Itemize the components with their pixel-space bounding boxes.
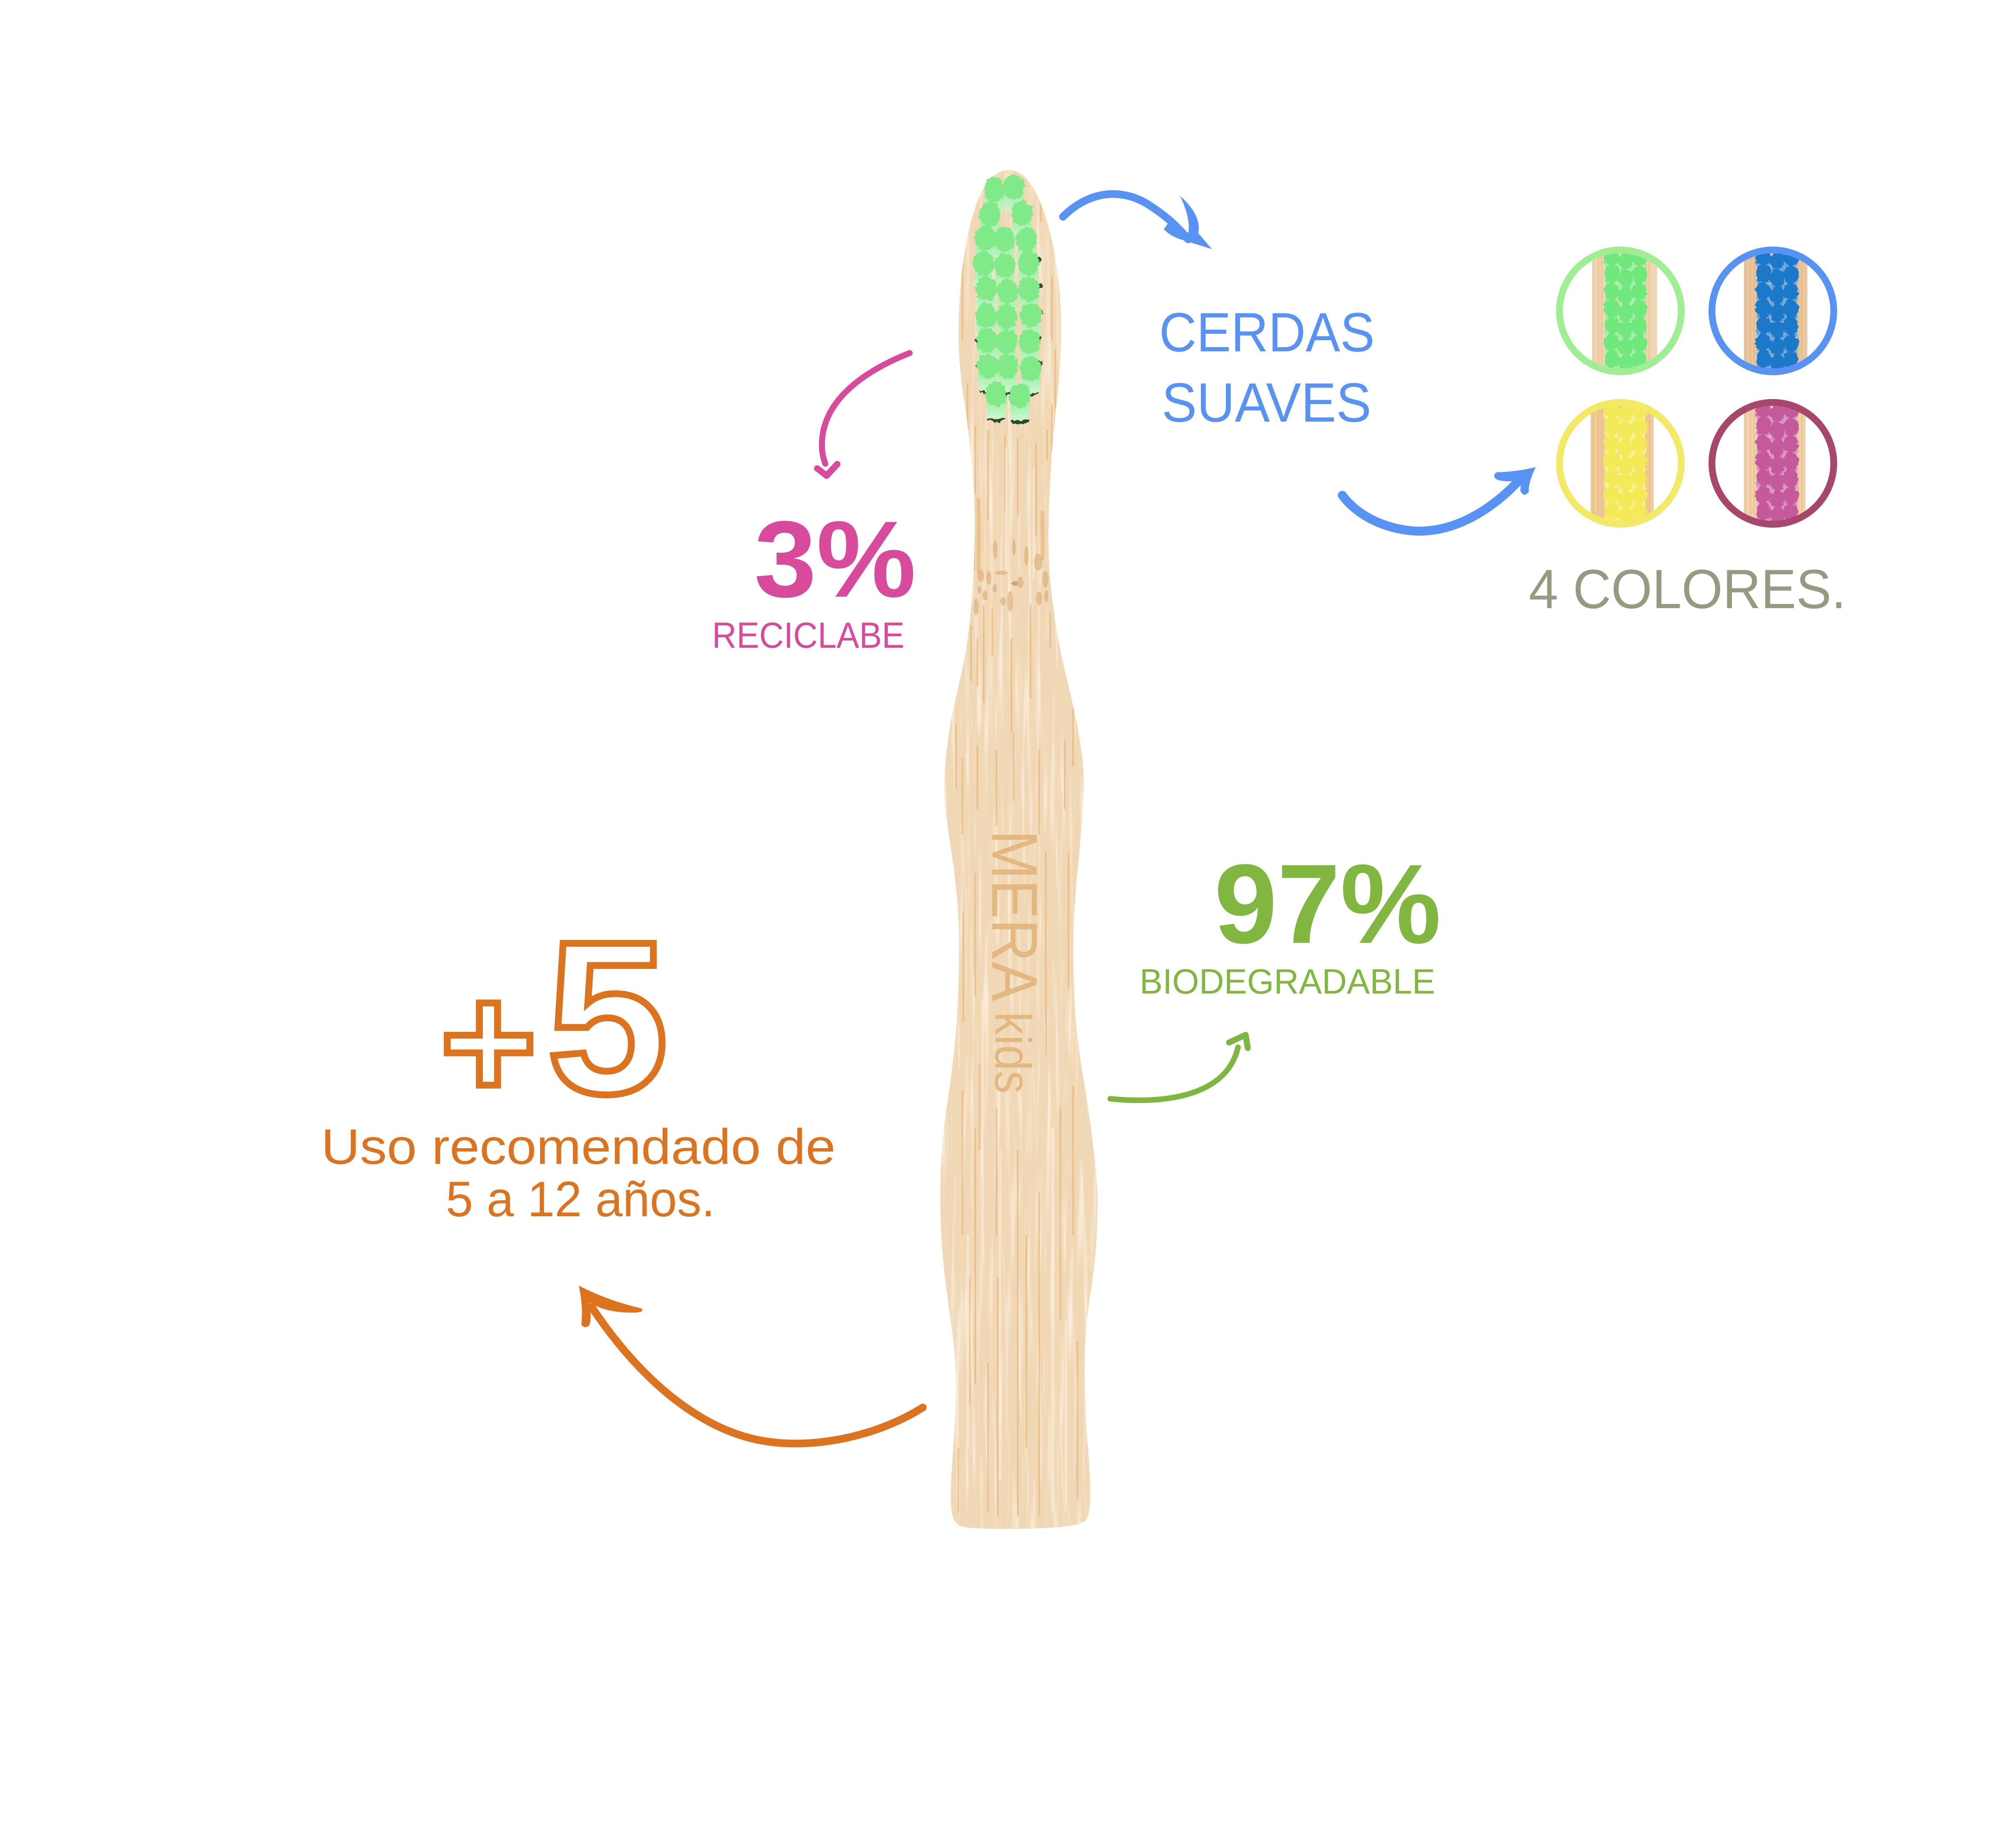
outlined age number: +	[440, 951, 537, 1132]
text: cerdas suaves	[1159, 301, 1375, 434]
outlined age number	[440, 896, 668, 1139]
arrow: to colour options	[1342, 467, 1536, 531]
text: cerdas suaves: CERDAS	[1159, 301, 1375, 363]
text: 4 colores: 4 COLORES.	[1529, 558, 1846, 620]
arrow: to 97 percent	[1110, 1035, 1248, 1100]
stat: 3 percent reciclable	[712, 499, 916, 656]
text: cerdas suaves: SUAVES	[1162, 371, 1371, 434]
colour option: green	[1559, 247, 1681, 381]
engraved logo: MERA	[978, 830, 1051, 1002]
stat: 3 percent reciclable: 3%	[754, 499, 916, 620]
stat: 97 percent biodegradable	[1140, 841, 1441, 1001]
engraved logo: kids	[984, 1012, 1041, 1094]
arrow: to 3 percent	[817, 353, 910, 476]
stat: 97 percent biodegradable: 97%	[1214, 841, 1441, 967]
green bristles	[973, 175, 1042, 424]
stat: 3 percent reciclable: RECICLABE	[712, 615, 905, 656]
text: recommended use	[321, 1119, 836, 1227]
arrow: handle to age text	[579, 1286, 923, 1444]
arrow: head to cerdas suaves	[1063, 194, 1212, 249]
colour option: burgundy	[1712, 400, 1834, 533]
colour option: blue	[1712, 247, 1834, 381]
toothbrush	[940, 170, 1098, 1529]
node marks	[974, 539, 1048, 615]
colour option: yellow	[1559, 400, 1681, 533]
outlined age number: 5	[547, 896, 668, 1139]
stat: 97 percent biodegradable: BIODEGRADABLE	[1140, 962, 1435, 1001]
text: recommended use: 5 a 12 años.	[446, 1171, 715, 1227]
text: recommended use: Uso recomendado de	[321, 1119, 836, 1175]
bamboo handle	[940, 170, 1098, 1529]
